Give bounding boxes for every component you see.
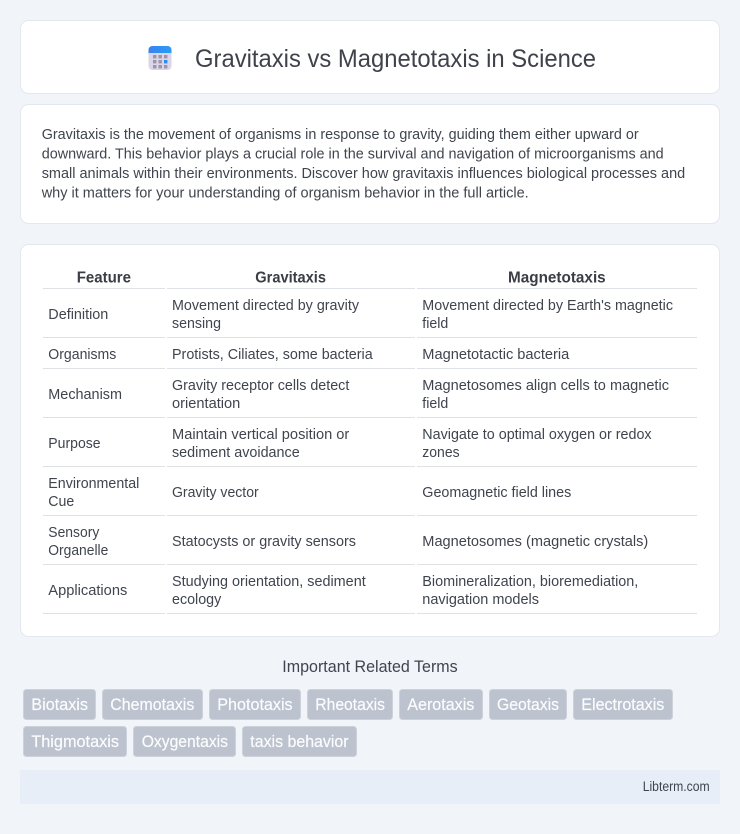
footer credit: Libterm.com xyxy=(643,779,710,794)
row: sensory organelle: Sensory xyxy=(48,525,100,541)
row: definition: Definition xyxy=(48,307,108,323)
row: mechanism xyxy=(48,378,669,412)
panel: title card xyxy=(20,20,720,94)
row: organisms: Organisms xyxy=(48,347,116,363)
intro text: why it matters for your understanding of organism behavior in the full article. xyxy=(41,184,529,201)
row: definition: Movement directed by gravity xyxy=(172,298,360,314)
row: applications: Applications xyxy=(48,583,127,599)
row: applications: ecology xyxy=(172,592,222,608)
intro text: small animals within their environments. Discover how gravitaxis influences biological processes and xyxy=(42,165,685,182)
table header: Feature xyxy=(77,270,131,287)
row: definition: sensing xyxy=(172,316,221,332)
row: environmental cue: Geomagnetic field lines xyxy=(422,485,571,501)
intro text xyxy=(41,126,685,201)
heading: important related terms: Important Related Terms xyxy=(282,657,458,676)
row: purpose xyxy=(48,427,652,461)
row: organisms: Magnetotactic bacteria xyxy=(422,347,570,363)
row: definition xyxy=(48,298,673,332)
row: definition: Movement directed by Earth's magnetic xyxy=(422,298,673,314)
related term tags xyxy=(24,690,672,756)
row: purpose: Maintain vertical position or xyxy=(172,427,349,443)
panel: introduction xyxy=(20,104,720,224)
related term tags: Geotaxis xyxy=(497,695,559,714)
table header: Magnetotaxis xyxy=(508,270,606,287)
row: applications: navigation models xyxy=(422,592,539,608)
related term tags: Phototaxis xyxy=(217,695,293,714)
related term tags: taxis behavior xyxy=(250,732,349,751)
row: purpose: Purpose xyxy=(48,436,101,452)
row: environmental cue: Gravity vector xyxy=(172,485,259,501)
row: definition: field xyxy=(422,316,448,332)
icon: calendar xyxy=(148,46,172,70)
related term tags: Chemotaxis xyxy=(110,695,194,714)
row: organisms xyxy=(48,347,570,363)
related term tags: Biotaxis xyxy=(31,695,88,714)
row: purpose: Navigate to optimal oxygen or redox xyxy=(422,427,652,443)
row: sensory organelle xyxy=(48,525,648,559)
row: environmental cue xyxy=(48,476,571,510)
intro text: Gravitaxis is the movement of organisms in response to gravity, guiding them either upward or xyxy=(42,126,639,143)
row: applications xyxy=(48,574,638,608)
row: purpose: zones xyxy=(422,445,460,461)
table header: Gravitaxis xyxy=(255,270,326,287)
footer xyxy=(20,770,720,804)
panel: comparison table xyxy=(20,244,720,636)
row: mechanism: Mechanism xyxy=(48,387,122,403)
table header xyxy=(77,270,606,287)
row: mechanism: Gravity receptor cells detect xyxy=(172,378,349,394)
row: sensory organelle: Statocysts or gravity sensors xyxy=(172,534,356,550)
related term tags: Rheotaxis xyxy=(315,695,385,714)
row: applications: Studying orientation, sediment xyxy=(172,574,366,590)
related term tags: Thigmotaxis xyxy=(31,732,119,751)
title: Gravitaxis vs Magnetotaxis in Science xyxy=(195,46,596,73)
row: environmental cue: Environmental xyxy=(48,476,139,492)
related term tags: Oxygentaxis xyxy=(142,732,228,751)
row: organisms: Protists, Ciliates, some bacteria xyxy=(172,347,374,363)
row: sensory organelle: Magnetosomes (magnetic crystals) xyxy=(422,534,648,550)
row: sensory organelle: Organelle xyxy=(48,543,108,559)
row: mechanism: Magnetosomes align cells to magnetic xyxy=(422,378,669,394)
row: environmental cue: Cue xyxy=(48,494,74,510)
related term tags: Electrotaxis xyxy=(581,695,664,714)
row: applications: Biomineralization, bioremediation, xyxy=(422,574,638,590)
row: purpose: sediment avoidance xyxy=(172,445,300,461)
row: mechanism: field xyxy=(422,396,448,412)
row: mechanism: orientation xyxy=(172,396,240,412)
intro text: downward. This behavior plays a crucial role in the survival and navigation of microorganisms and xyxy=(42,145,664,162)
related term tags: Aerotaxis xyxy=(407,695,474,714)
